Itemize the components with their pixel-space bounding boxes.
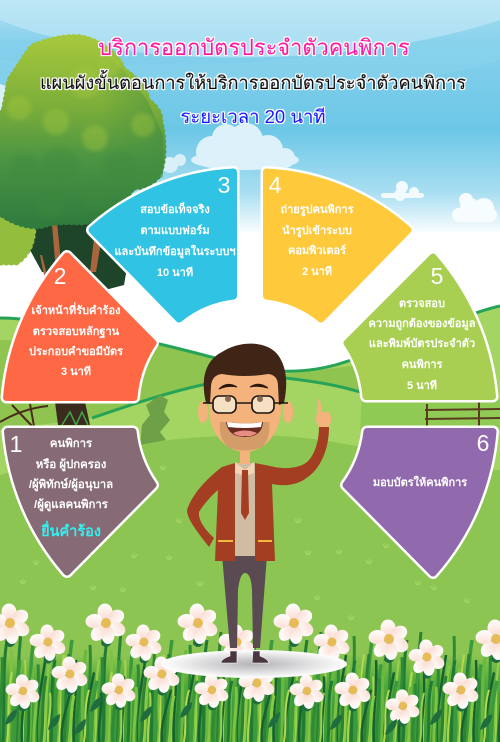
background: grass tufts: [20, 465, 470, 620]
white oval platform: [161, 650, 347, 678]
panel 4: photograph: [266, 172, 408, 319]
background: hills: [0, 306, 500, 742]
panel 5 text: 5 นาที: [407, 379, 437, 392]
panel 3 text: สอบข้อเท็จจริง: [140, 202, 210, 216]
panel 4 text: คอมพิวเตอร์: [288, 244, 346, 257]
panel 4 text: นำรูปเข้าระบบ: [282, 224, 352, 238]
panel 5 text: และพิมพ์บัตรประจำตัว: [369, 337, 475, 350]
panel 3 text: และบันทึกข้อมูลในระบบฯ: [114, 244, 236, 259]
panel 4 text: 2 นาที: [302, 265, 332, 278]
background: clouds: [0, 84, 497, 222]
number 2: 2: [54, 263, 66, 289]
number 5: 5: [431, 263, 443, 289]
panel 6: hand over card: [346, 430, 493, 573]
character shirt and tie: [233, 462, 257, 556]
character head: [198, 344, 293, 464]
panel 5 text: คนพิการ: [402, 358, 443, 371]
number 6: 6: [477, 430, 489, 456]
subtitle: แผนผังขั้นตอนการให้บริการออกบัตรประจำตัวคนพิการ: [40, 70, 466, 93]
panel 2 text: เจ้าหน้าที่รับคำร้อง: [32, 302, 120, 317]
panel 5 text: ตรวจสอบ: [399, 298, 445, 310]
character jacket: [187, 427, 329, 561]
number 4: 4: [269, 172, 282, 198]
duration: ระยะเวลา 20 นาที: [180, 106, 326, 127]
panel 2 text: ตรวจสอบหลักฐาน: [33, 325, 120, 339]
panel 2 text: ประกอบคำขอมีบัตร: [29, 345, 123, 358]
panel 1 text: /ผู้ดูแลคนพิการ: [34, 498, 109, 512]
number 1: 1: [10, 431, 22, 457]
panel 3: fact check: [92, 172, 236, 319]
panel 3 text: ตามแบบฟอร์ม: [140, 224, 210, 237]
character shoes: [221, 651, 269, 663]
panel 1 text: หรือ ผู้ปกครอง: [36, 458, 106, 472]
panel 2 text: 3 นาที: [61, 365, 91, 378]
panel 1 text: /ผู้พิทักษ์/ผู้อนุบาล: [29, 477, 113, 492]
background: tree: [0, 37, 163, 290]
panel 2: officer receives: [6, 256, 153, 398]
flowers: front row: [5, 656, 480, 726]
character legs: [222, 555, 267, 648]
panel 6 text: มอบบัตรให้คนพิการ: [373, 475, 467, 489]
panel 1: applicant submits: [8, 431, 153, 572]
panel 3 text: 10 นาที: [157, 266, 193, 279]
panel 5 text: ความถูกต้องของข้อมูล: [368, 317, 476, 331]
panel 4 text: ถ่ายรูปคนพิการ: [280, 203, 354, 217]
number 3: 3: [218, 172, 230, 198]
character: man pointing up: [187, 344, 331, 663]
character pointing hand: [316, 399, 331, 427]
background: tree base and fence: [0, 395, 500, 445]
panel 1 highlight: submit request: ยื่นคำร้อง: [41, 520, 101, 540]
flowers: back row: [0, 604, 500, 679]
panel 1 text: คนพิการ: [50, 437, 93, 450]
panel 5: verify and print: [347, 257, 492, 396]
background: sky: [0, 0, 500, 332]
title: บริการออกบัตรประจำตัวคนพิการ: [98, 35, 410, 60]
grass leaves: [5, 696, 492, 735]
grass blades: [0, 632, 500, 742]
